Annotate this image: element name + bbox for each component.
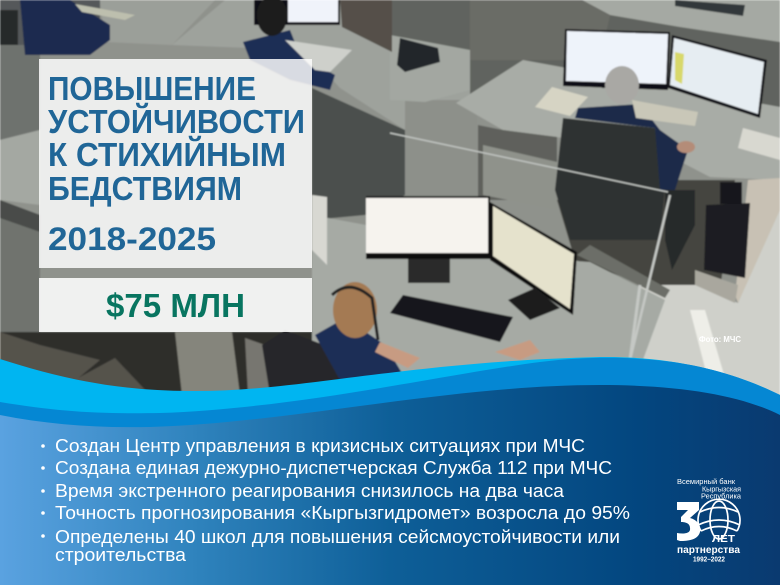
bullet 5: Определены 40 школ для повышения сейсмоустойчивости или xyxy=(55,527,620,547)
lower panel with gradient xyxy=(0,385,780,585)
bullet 2: Создана единая дежурно-диспетчерская Служба 112 при МЧС xyxy=(55,458,612,478)
logo: World Bank Kyrgyz Republic 30 years: 1992–2022 xyxy=(693,556,725,564)
main operator body xyxy=(575,104,688,190)
logo: World Bank Kyrgyz Republic 30 years: Всемирный банк xyxy=(677,477,736,486)
main monitor right xyxy=(668,35,767,118)
title: УСТОЙЧИВОСТИ xyxy=(48,102,305,140)
bullet 5: строительства xyxy=(55,545,187,565)
main operator hair xyxy=(605,64,639,104)
bottom left dark floor xyxy=(0,332,312,395)
top middle desk xyxy=(172,0,470,130)
title: К СТИХИЙНЫМ xyxy=(48,135,286,173)
bullet 3: Время экстренного реагирования снизилось на два часа xyxy=(55,481,565,501)
headset xyxy=(603,65,620,88)
logo: World Bank Kyrgyz Republic 30 years: ЛЕТ xyxy=(712,534,735,545)
top monitors xyxy=(340,0,392,52)
lower operator body xyxy=(315,318,405,385)
logo globe xyxy=(698,499,740,539)
logo: World Bank Kyrgyz Republic 30 years: Республика xyxy=(701,492,742,500)
title xyxy=(48,70,305,207)
logo: World Bank Kyrgyz Republic 30 years: Кыргызская xyxy=(702,484,741,494)
PC tower xyxy=(704,203,750,278)
main operator hand xyxy=(677,141,695,153)
phone xyxy=(397,38,440,72)
wave: medium blue xyxy=(0,358,780,450)
logo: World Bank Kyrgyz Republic 30 years: партнерства xyxy=(677,544,740,556)
lower desk xyxy=(312,215,665,395)
main operator chair xyxy=(555,118,665,240)
note xyxy=(738,128,780,160)
title: ПОВЫШЕНИЕ xyxy=(48,70,256,107)
top left desk xyxy=(100,0,215,45)
keyboard lower xyxy=(390,295,513,342)
bullet 1: Создан Центр управления в кризисных ситуациях при МЧС xyxy=(55,436,585,456)
lower operator arm xyxy=(375,342,420,368)
drawers xyxy=(483,145,557,210)
lower monitor right xyxy=(490,202,577,315)
left side strip xyxy=(0,45,40,140)
main monitor left xyxy=(563,29,670,90)
logo numeral 3 xyxy=(677,502,700,541)
lower operator chair xyxy=(262,330,370,395)
title panel xyxy=(39,59,312,268)
floor light xyxy=(690,310,730,395)
top right desk xyxy=(582,0,780,42)
funding amount: $75 МЛН xyxy=(106,287,245,324)
cabinet under main desk xyxy=(735,178,780,303)
redraw hair over monitor xyxy=(605,66,639,104)
main desk xyxy=(456,60,780,180)
left cabinet xyxy=(405,100,477,200)
folder xyxy=(535,87,588,116)
under desk and floor xyxy=(557,180,735,290)
bullet 4: Точность прогнозирования «Кыргызгидромет» возросла до 95% xyxy=(55,503,630,523)
lower monitor left xyxy=(366,196,490,259)
bullet list xyxy=(41,436,630,565)
glass line xyxy=(390,133,668,192)
years: 2018-2025 xyxy=(48,221,216,257)
phone desk xyxy=(390,35,470,102)
top middle operator xyxy=(243,30,335,90)
logo: World Bank Kyrgyz Republic 30 years xyxy=(677,477,742,564)
photo: crisis control room xyxy=(0,0,780,420)
photo credit: Фото: МЧС xyxy=(699,334,741,344)
bullet 5 xyxy=(41,527,620,565)
top left operator xyxy=(20,0,110,55)
title: БЕДСТВИЯМ xyxy=(48,170,242,207)
wave: light blue xyxy=(0,357,780,450)
funding panel xyxy=(39,278,312,332)
glass post xyxy=(630,195,670,360)
lower operator head xyxy=(333,282,377,338)
keyboard xyxy=(632,100,698,126)
